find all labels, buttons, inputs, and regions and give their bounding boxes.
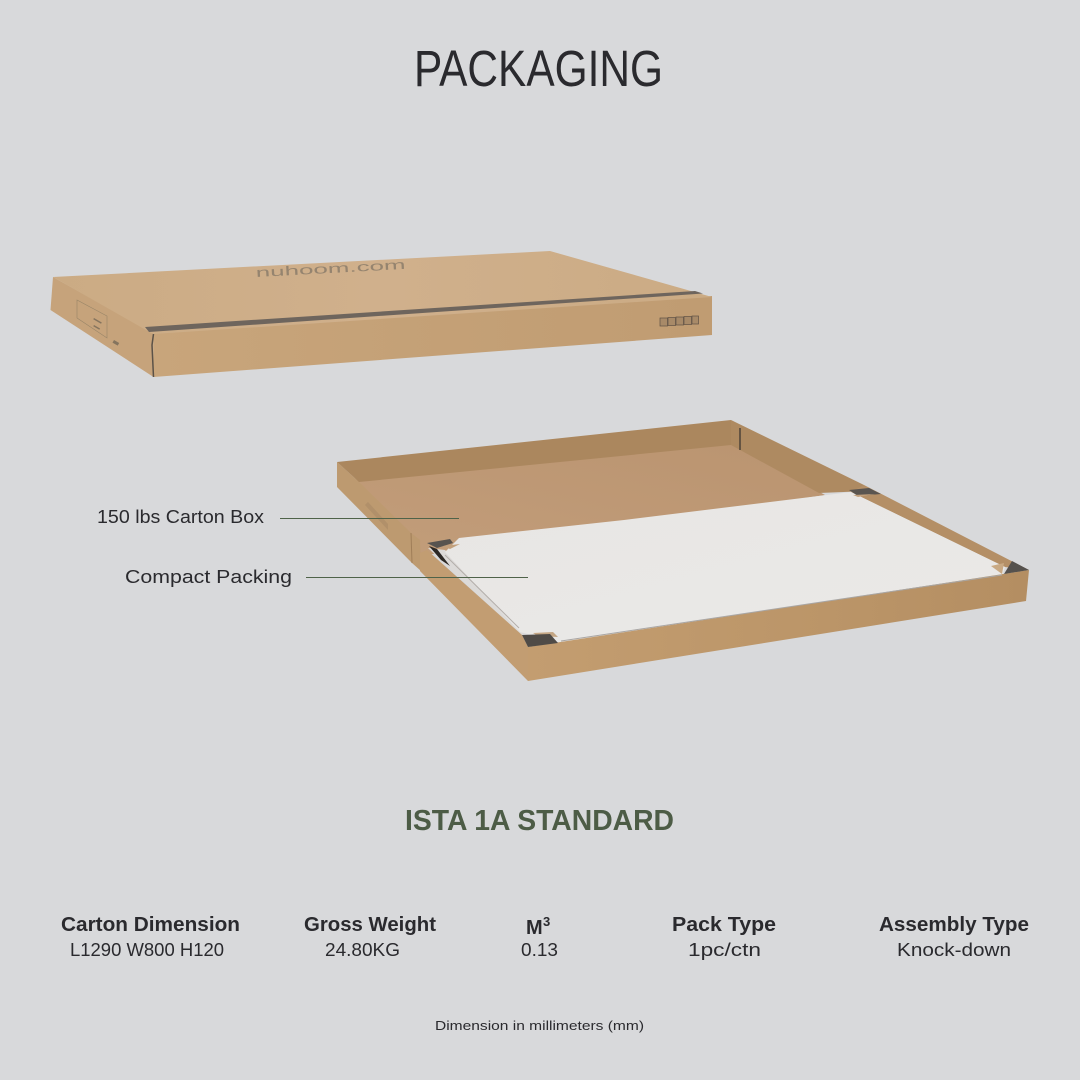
foam front shadow (561, 575, 1002, 641)
spec: cubic metres: M (526, 917, 543, 939)
left outer wall (337, 462, 421, 571)
spec: pack type: 1pc/ctn (688, 940, 761, 960)
spec: carton dimension (61, 914, 240, 960)
foam side (428, 548, 526, 640)
spec: cubic metres: 0.13 (521, 940, 558, 960)
standard heading: ISTA 1A STANDARD (405, 805, 674, 837)
spec: cubic metres: 3 (543, 914, 550, 929)
foam side edge (445, 555, 519, 628)
corner protector: front right (991, 561, 1029, 574)
tape stripe (145, 291, 703, 332)
near left wall (420, 550, 528, 681)
spec: cubic metres (521, 914, 558, 960)
spec: gross weight (304, 914, 436, 960)
tab crease (411, 533, 412, 563)
callout: compact packing: Compact Packing (125, 567, 292, 587)
carton floor (355, 443, 825, 556)
corner protector: back left (427, 539, 460, 566)
spec: carton dimension: L1290 W800 H120 (70, 940, 224, 960)
corner protector: back right (849, 488, 881, 497)
side label (77, 300, 107, 338)
footnote: Dimension in millimeters (mm) (435, 1018, 644, 1033)
spec: pack type (672, 914, 776, 960)
handling symbols (660, 316, 698, 326)
far right thin wall (851, 485, 1029, 570)
right inner wall (731, 420, 868, 493)
carton front face (153, 296, 712, 377)
corner seam (152, 334, 154, 377)
spec: assembly type: Assembly Type (879, 914, 1029, 936)
spec: carton dimension: Carton Dimension (61, 914, 240, 936)
brand print: nuhoom.com (255, 257, 406, 280)
carton top face (53, 251, 712, 334)
callout: 150 lbs carton box: 150 lbs Carton Box (97, 507, 264, 527)
spec: gross weight: Gross Weight (304, 914, 436, 936)
closed carton box (50, 251, 712, 377)
spec: assembly type (879, 914, 1029, 960)
title: PACKAGING (414, 40, 663, 97)
spec: pack type: Pack Type (672, 914, 776, 936)
corner protector: front left (522, 632, 558, 647)
carton left side (50, 277, 154, 377)
spec: assembly type: Knock-down (897, 940, 1011, 960)
spec: gross weight: 24.80KG (325, 940, 400, 960)
corner crease (739, 428, 741, 450)
left wall print (365, 502, 388, 530)
open carton box (337, 420, 1029, 681)
back wall (337, 420, 731, 482)
foam sheet (445, 492, 1005, 643)
near front wall (528, 570, 1029, 681)
